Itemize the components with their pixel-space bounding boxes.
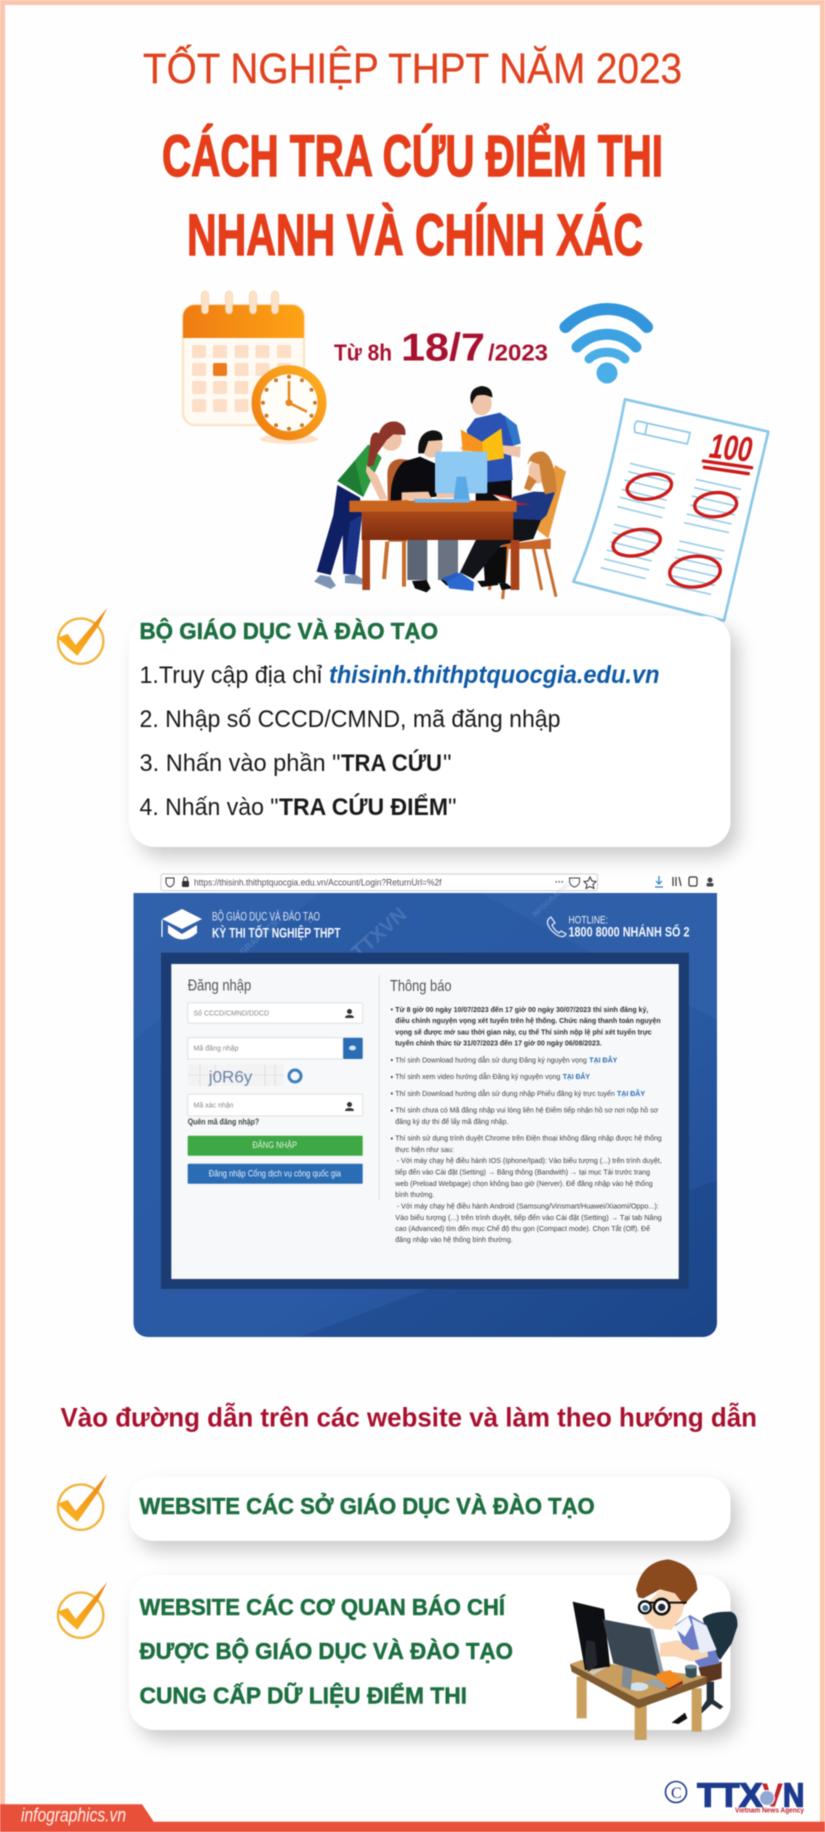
panel text line 2: ĐƯỢC BỘ GIÁO DỤC VÀ ĐÀO TẠO <box>140 1637 513 1664</box>
icon: wifi <box>566 309 647 384</box>
title: line 3: NHANH VÀ CHÍNH XÁC <box>187 203 643 268</box>
notices: Thí sinh sử dụng trình duyệt Chrome trên Điện thoại không đăng nhập được hệ thống <box>395 1134 662 1142</box>
date line: /2023 <box>488 340 548 366</box>
step 4: " <box>448 794 457 821</box>
notices: Thí sinh chưa có Mã đăng nhập vui lòng liên hệ Điểm tiếp nhận hồ sơ nơi nộp hồ sơ <box>395 1106 658 1114</box>
browser address bar: https://thisinh.thithptquocgia.edu.vn/Account/Login?ReturnUrl=%2f <box>194 878 442 888</box>
login page header <box>162 909 690 941</box>
notices: web (Preload Webpage) chọn không bao giờ (Nerver). Để đăng nhập vào hệ thống <box>394 1179 653 1188</box>
illustration: boy at computer <box>570 1559 737 1740</box>
notices: đăng ký dự thi để lấy mã đăng nhập. <box>395 1117 508 1126</box>
notices: TẠI ĐÂY <box>563 1072 590 1081</box>
score 100: 100 <box>707 427 754 470</box>
browser address bar: ··· <box>555 877 564 887</box>
logo: TTXVN: TTX <box>697 1777 762 1814</box>
notices: - Với máy chạy hệ điều hành Android (Samsung/Vinsmart/Huawei/Xiaomi/Oppo...): <box>397 1202 659 1210</box>
logo: TTXVN: Vietnam News Agency <box>735 1808 804 1815</box>
illustration: people around a table <box>314 386 566 599</box>
step 4: TRA CỨU ĐIỂM <box>279 793 448 821</box>
login form: j0R6y <box>208 1068 253 1087</box>
login form: ĐĂNG NHẬP <box>252 1140 297 1150</box>
login form: Đăng nhập <box>188 978 251 995</box>
watermarks on screenshot: INFOGRAPHICS <box>532 877 576 918</box>
browser address bar <box>161 874 714 891</box>
step 1: thisinh.thithptquocgia.edu.vn <box>329 661 660 689</box>
login page header: 1800 8000 NHÁNH SỐ 2 <box>568 924 690 939</box>
panel: press agencies <box>129 1575 730 1730</box>
login form: Mã đăng nhập <box>194 1044 238 1053</box>
notices: điều chỉnh nguyện vọng xét tuyển trên hệ thống. Chức năng thanh toán nguyện <box>395 1016 661 1025</box>
icon: calendar with clock <box>183 291 322 444</box>
notices: đăng nhập vào hệ thống bình thường. <box>395 1235 513 1244</box>
watermarks on screenshot <box>222 877 576 971</box>
step 4: 4. Nhấn vào " <box>140 794 278 821</box>
step 2: 2. Nhập số CCCD/CMND, mã đăng nhập <box>140 706 560 733</box>
login form <box>187 978 363 1184</box>
footer site name: infographics.vn <box>21 1806 126 1826</box>
step 4 <box>140 793 457 821</box>
notices: cao (Advanced) tìm đến mục Chế độ thu gọn (Compact mode). Chọn Tắt (Off). Để <box>395 1224 650 1233</box>
notices: Thông báo <box>390 978 452 995</box>
icon: check mark 3 <box>57 1582 107 1638</box>
step 3: TRA CỨU <box>341 749 442 777</box>
watermarks on screenshot: INFOGRAPHICS <box>222 918 280 971</box>
panel text line 3: CUNG CẤP DỮ LIỆU ĐIỂM THI <box>140 1681 467 1708</box>
login page header: BỘ GIÁO DỤC VÀ ĐÀO TẠO <box>212 911 320 924</box>
login form: Số CCCD/CMND/DDCD <box>194 1008 269 1018</box>
step 3 <box>140 749 452 777</box>
notices: TẠI ĐÂY <box>617 1089 645 1098</box>
notices: Thí sinh Download hướng dẫn sử dụng Đăng ký nguyện vọng <box>395 1056 587 1064</box>
login page header: HOTLINE: <box>568 914 608 926</box>
logo: TTXVN: N <box>783 1777 804 1814</box>
notices: Từ 8 giờ 00 ngày 10/07/2023 đến 17 giờ 00 ngày 30/07/2023 thí sinh đăng ký, <box>395 1005 648 1014</box>
step 1: 1.Truy cập địa chỉ <box>140 662 323 689</box>
notices: Vào biểu tượng (...) trên trình duyệt, tiếp đến vào Cài đặt (Setting) → Tại tab Nâng <box>395 1213 662 1222</box>
logo: TTXVN <box>666 1777 804 1815</box>
notices: TẠI ĐÂY <box>589 1056 617 1064</box>
watermarks on screenshot: TTXVN <box>348 903 411 964</box>
icon: check mark 2 <box>57 1474 107 1530</box>
notices: Thí sinh Download hướng dẫn sử dụng nhập Phiếu đăng ký trực tuyến <box>395 1089 615 1098</box>
login form: Mã xác nhận <box>194 1101 234 1110</box>
logo: TTXVN: V <box>762 1777 783 1814</box>
notices: vọng sẽ được mở sau thời gian này, cụ thể Thí sinh nộp lệ phí xét tuyển trực <box>395 1028 652 1036</box>
notices: thực hiện như sau: <box>395 1145 454 1154</box>
notices: tiếp đến vào Cài đặt (Setting) → Băng thông (Bandwith) → tại mục Tải trước trang <box>395 1168 650 1176</box>
notices: tuyến chính thức từ 31/07/2023 đến 17 giờ 00 ngày 06/08/2023. <box>395 1038 602 1048</box>
icon: check mark 1 <box>57 608 107 664</box>
subheading: Vào đường dẫn trên các website và làm theo hướng dẫn <box>60 1402 757 1433</box>
panel: Bộ Giáo dục và Đào tạo steps <box>129 616 730 847</box>
login page header: KỲ THI TỐT NGHIỆP THPT <box>212 924 341 941</box>
title: line 1: TỐT NGHIỆP THPT NĂM 2023 <box>143 44 682 93</box>
notices: bình thường. <box>395 1190 434 1199</box>
notices: - Với máy chạy hệ điều hành IOS (Iphone/Ipad): Vào biểu tượng (...) trên trình duyệt, <box>397 1156 662 1165</box>
login form: Quên mã đăng nhập? <box>188 1117 259 1126</box>
footer band <box>0 1804 825 1832</box>
logo: TTXVN: C <box>671 1785 682 1802</box>
notices: Thí sinh xem video hướng dẫn Đăng ký nguyện vọng <box>395 1072 560 1081</box>
panel text line 1: WEBSITE CÁC CƠ QUAN BÁO CHÍ <box>140 1593 506 1620</box>
illustration: exam paper with 100 score <box>573 399 768 621</box>
date line: 18/7 <box>401 326 485 370</box>
login form: Đăng nhập Cổng dịch vụ công quốc gia <box>209 1168 341 1178</box>
panel heading: BỘ GIÁO DỤC VÀ ĐÀO TẠO <box>140 617 438 644</box>
panel text: WEBSITE CÁC SỞ GIÁO DỤC VÀ ĐÀO TẠO <box>140 1491 595 1519</box>
date line: Từ 8h <box>334 340 392 366</box>
notices <box>390 978 662 1244</box>
step 3: 3. Nhấn vào phần " <box>140 750 340 777</box>
panel: website of departments <box>129 1477 730 1541</box>
date line <box>334 326 548 370</box>
screenshot: login page <box>134 877 717 1337</box>
step 3: " <box>443 750 452 777</box>
step 1 <box>140 661 660 689</box>
